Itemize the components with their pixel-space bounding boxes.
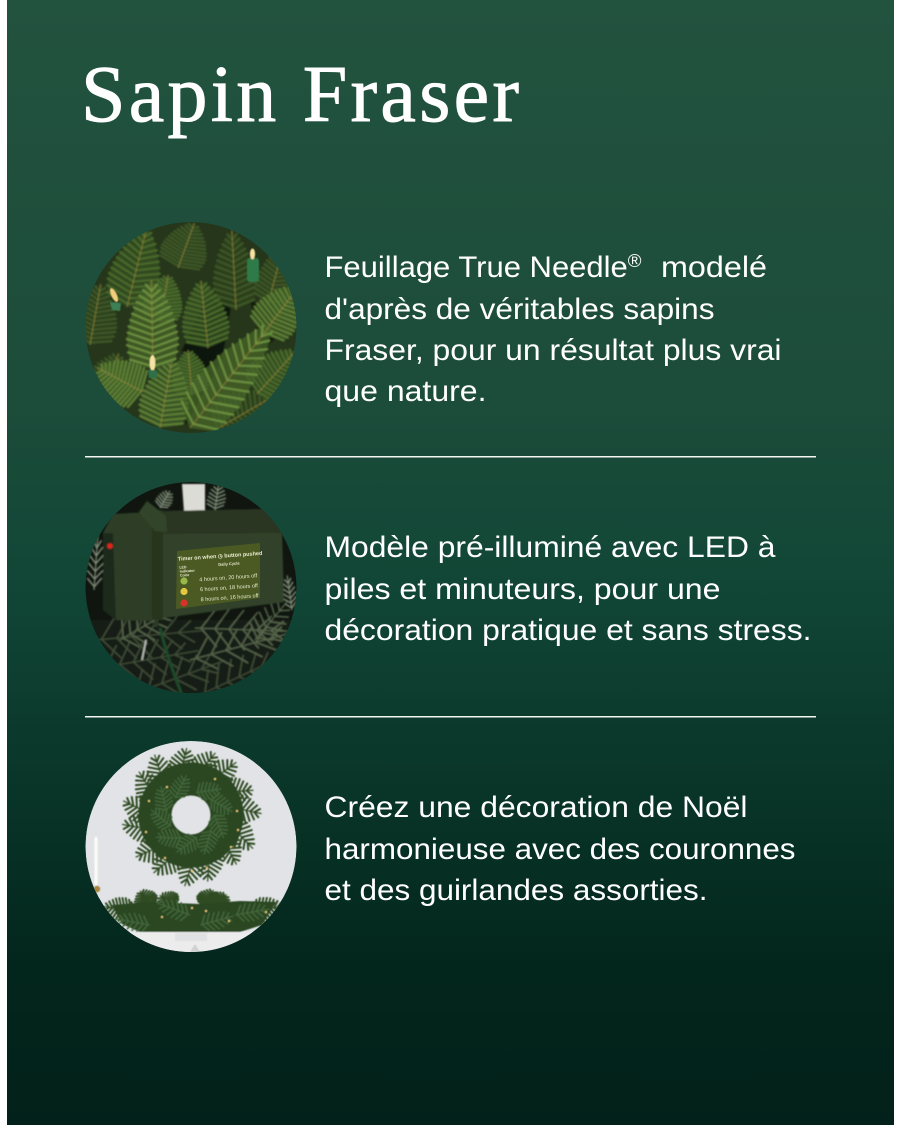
mantel (128, 931, 254, 952)
divider (85, 456, 816, 458)
icon: wreath and garland photo (86, 741, 296, 954)
timer label: Daily Cycle (218, 560, 241, 567)
timer label: Timer on when ◷ button pushed (178, 551, 263, 563)
battery box body (103, 501, 284, 627)
LED lights (108, 248, 259, 378)
timer label (176, 543, 266, 609)
body text: matching decorations: harmonieuse avec des couronnes (324, 833, 796, 866)
wreath (117, 744, 265, 891)
icon: battery box with timer photo (86, 482, 296, 693)
garland (104, 888, 281, 932)
divider (85, 716, 816, 718)
body text: true needle foliage: ® (628, 251, 642, 271)
body text: true needle foliage: modelé (661, 251, 767, 284)
timer label: Color (180, 573, 190, 578)
body text: pre-lit LED: Modèle pré-illuminé avec LED à (324, 531, 776, 564)
body text: matching decorations (324, 791, 796, 907)
timer label: 8 hours on, 16 hours off (201, 593, 259, 603)
body text: true needle foliage: Feuillage True Needle (324, 251, 618, 284)
timer label: Indicator (180, 569, 196, 574)
timer label: LED (179, 565, 187, 570)
title: Sapin Fraser (81, 51, 519, 139)
body text: pre-lit LED (324, 531, 812, 647)
body text: matching decorations: Créez une décoration de Noël (324, 791, 748, 824)
timer label: 6 hours on, 18 hours off (200, 583, 259, 593)
icon: pine needle close-up photo (86, 222, 296, 433)
body text: true needle foliage: que nature. (324, 375, 486, 408)
body text: true needle foliage: Fraser, pour un résultat plus vrai (324, 334, 782, 367)
body text: true needle foliage (324, 251, 782, 408)
candle (94, 837, 100, 892)
body text: pre-lit LED: piles et minuteurs, pour une (324, 573, 720, 606)
body text: matching decorations: et des guirlandes assorties. (324, 874, 708, 907)
body text: pre-lit LED: décoration pratique et sans stress. (324, 614, 812, 647)
body text: true needle foliage: d'après de véritables sapins (324, 293, 714, 326)
timer label: 4 hours on, 20 hours off (199, 573, 258, 583)
